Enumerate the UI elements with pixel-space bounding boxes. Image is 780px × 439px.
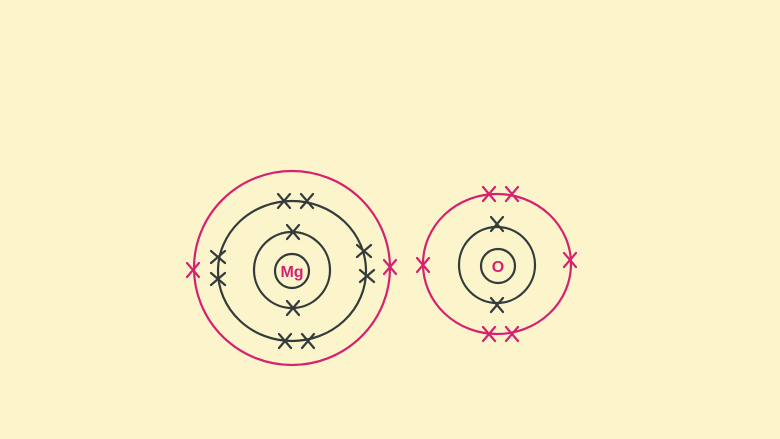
O nucleus: O (492, 259, 504, 276)
Mg nucleus: Mg (280, 264, 304, 281)
atom: oxygen (417, 187, 576, 341)
O nucleus (481, 249, 515, 283)
Mg electrons pink (187, 260, 396, 277)
O electrons pink (417, 187, 576, 341)
O electrons dark (491, 217, 503, 312)
Mg electrons dark (211, 194, 374, 348)
Mg nucleus (275, 254, 309, 288)
O shell 2 (423, 194, 571, 334)
Mg shell 1 (254, 232, 330, 308)
atom: magnesium (187, 171, 396, 365)
Mg shell 3 (194, 171, 390, 365)
O shell 1 (459, 227, 535, 303)
Mg shell 2 (218, 201, 366, 341)
